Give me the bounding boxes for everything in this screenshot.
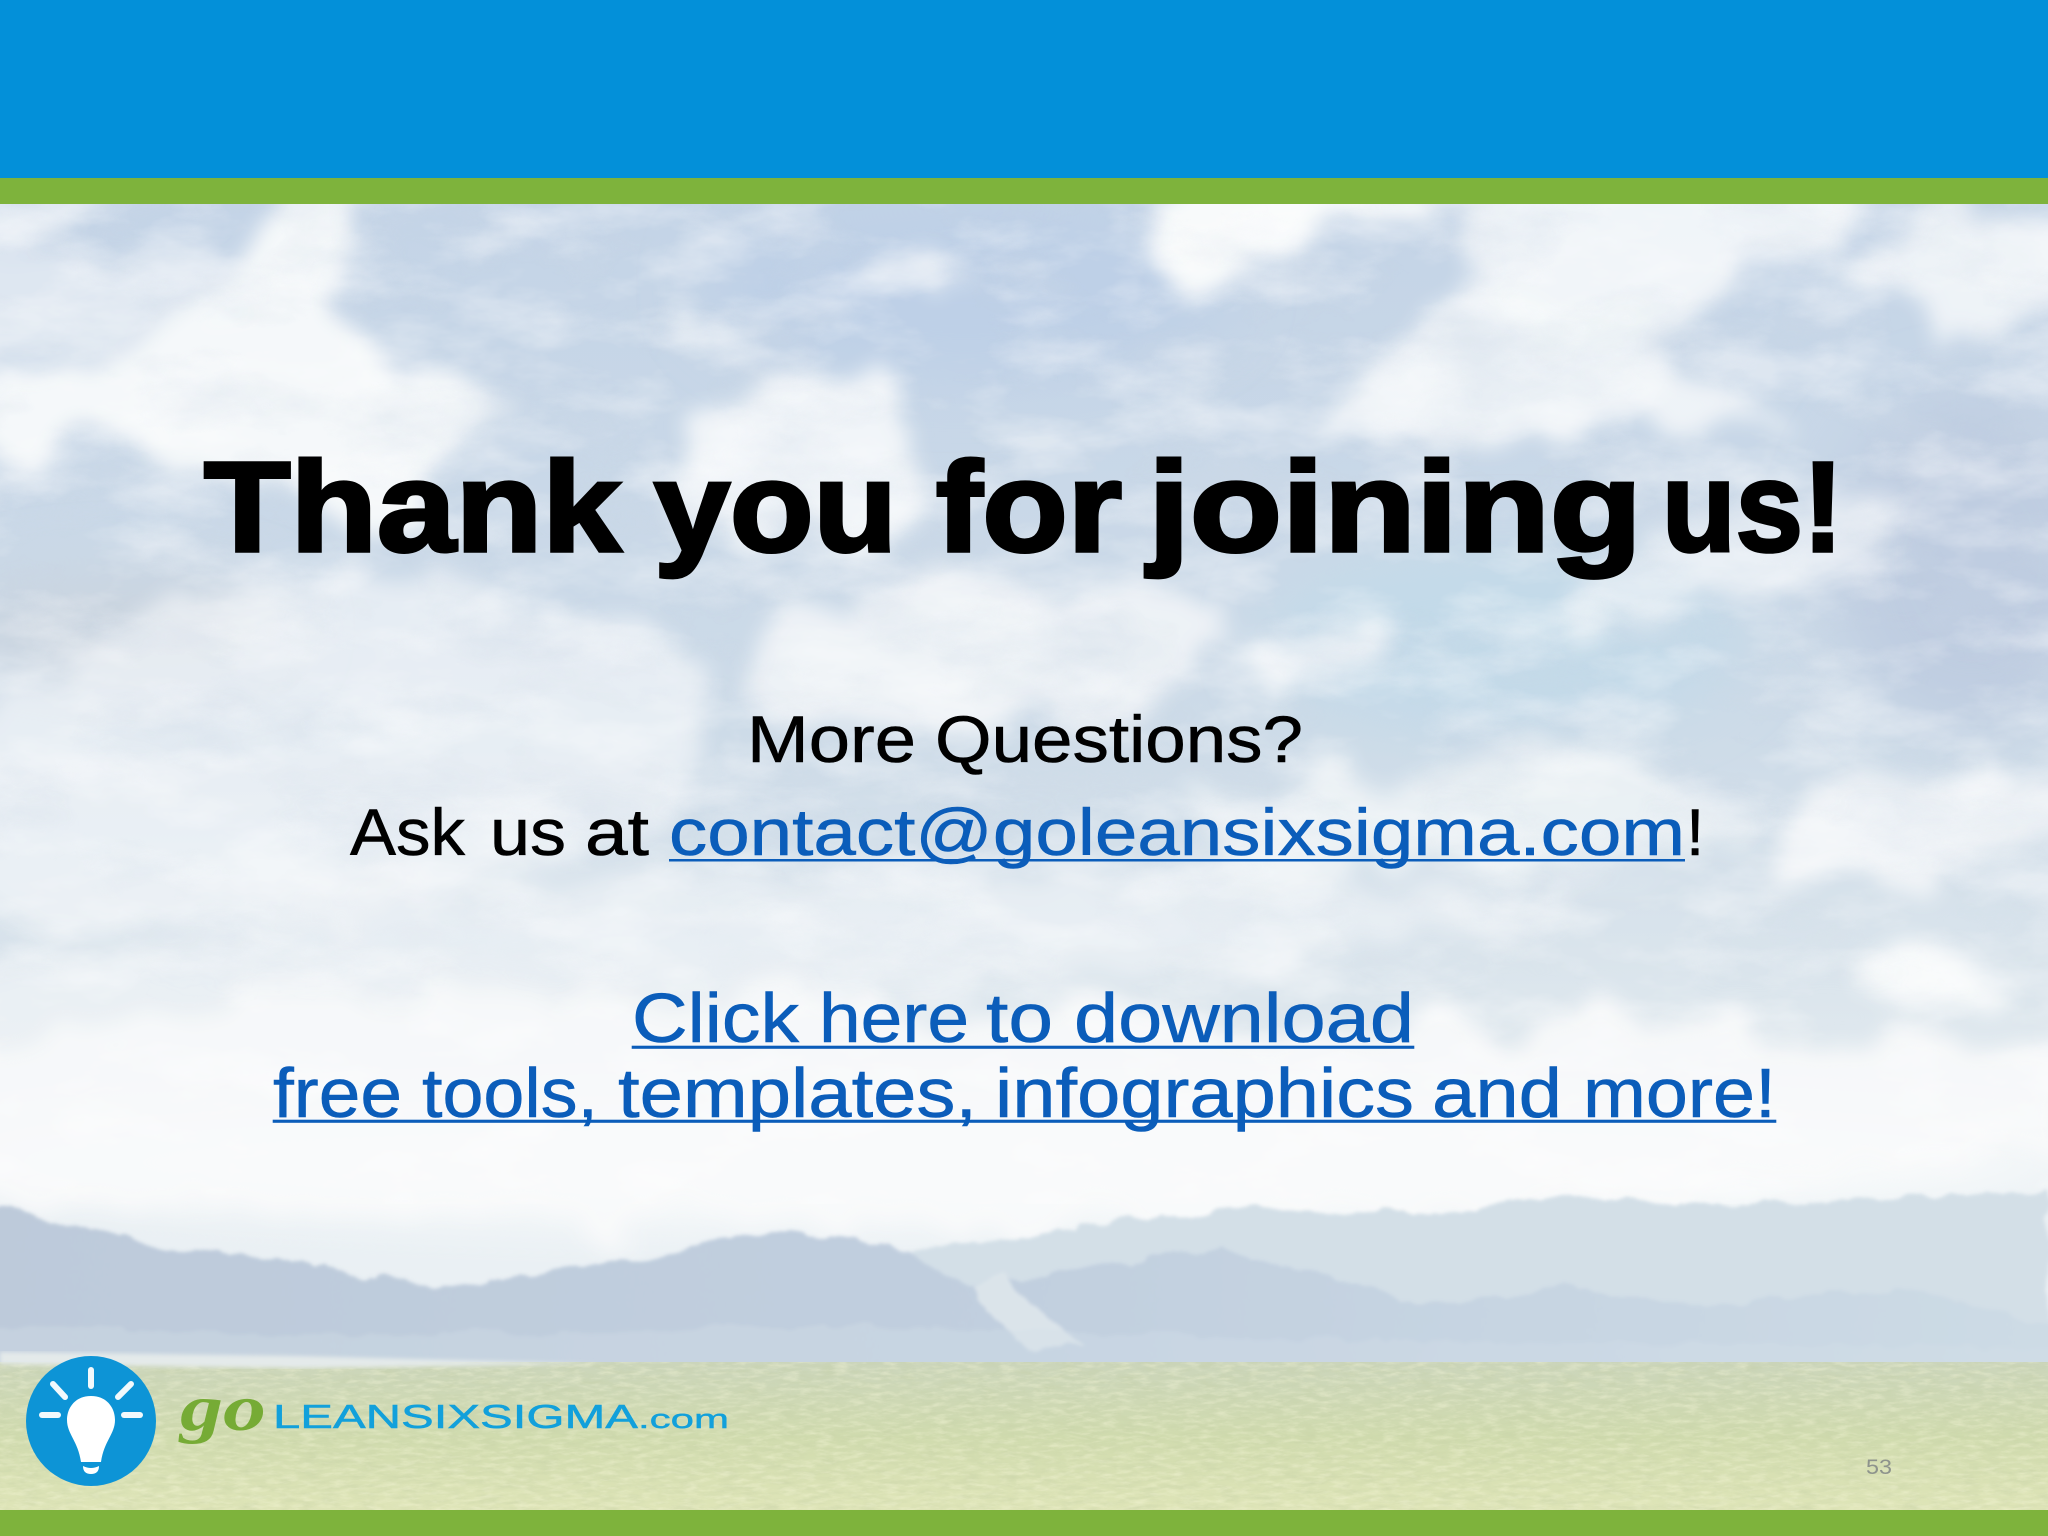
link: download free tools: download — [1074, 979, 1414, 1057]
text: more questions: More — [747, 702, 916, 776]
page number: 53 — [1866, 1456, 1892, 1479]
link: download free tools: infographics — [995, 1054, 1414, 1132]
link: download free tools: free — [273, 1054, 402, 1132]
bottom green band — [0, 1510, 2048, 1536]
title: for — [936, 436, 1122, 579]
text: ask us at contact email — [350, 795, 1704, 869]
text: ask us at contact email: us — [490, 795, 566, 869]
background: sky and clouds photo — [0, 183, 2048, 1374]
icon: light bulb badge — [26, 1356, 156, 1486]
logo wordmark: go — [177, 1372, 266, 1445]
logo — [26, 1356, 729, 1486]
logo wordmark: LEANSIXSIGMA — [273, 1398, 638, 1435]
text: ask us at contact email: at — [585, 795, 649, 869]
title: Thank — [204, 436, 622, 579]
text: ask us at contact email: ! — [1686, 795, 1704, 869]
link: download free tools: here — [819, 979, 969, 1057]
title: you — [654, 436, 897, 579]
title — [204, 436, 1843, 579]
link: download free tools: more! — [1583, 1054, 1776, 1132]
link: download free tools: Click — [632, 979, 800, 1057]
green stripe under top band — [0, 178, 2048, 204]
link: download free tools: and — [1432, 1054, 1562, 1132]
text: ask us at contact email: contact@goleansixsigma.com — [669, 795, 1685, 869]
title: us! — [1662, 436, 1843, 579]
logo wordmark: .com — [638, 1404, 729, 1434]
background: distant mountains — [0, 1191, 2048, 1371]
background: green field — [0, 1352, 2048, 1512]
link: download free tools — [273, 979, 1776, 1132]
text: more questions — [747, 702, 1303, 776]
link: download free tools: tools, — [422, 1054, 598, 1132]
top blue band — [0, 0, 2048, 178]
logo wordmark — [177, 1372, 729, 1445]
text: more questions: Questions? — [935, 702, 1303, 776]
title: joining — [1146, 436, 1642, 579]
link: download free tools: to — [986, 979, 1053, 1057]
link: download free tools: templates, — [618, 1054, 977, 1132]
text: ask us at contact email: Ask — [350, 795, 466, 869]
